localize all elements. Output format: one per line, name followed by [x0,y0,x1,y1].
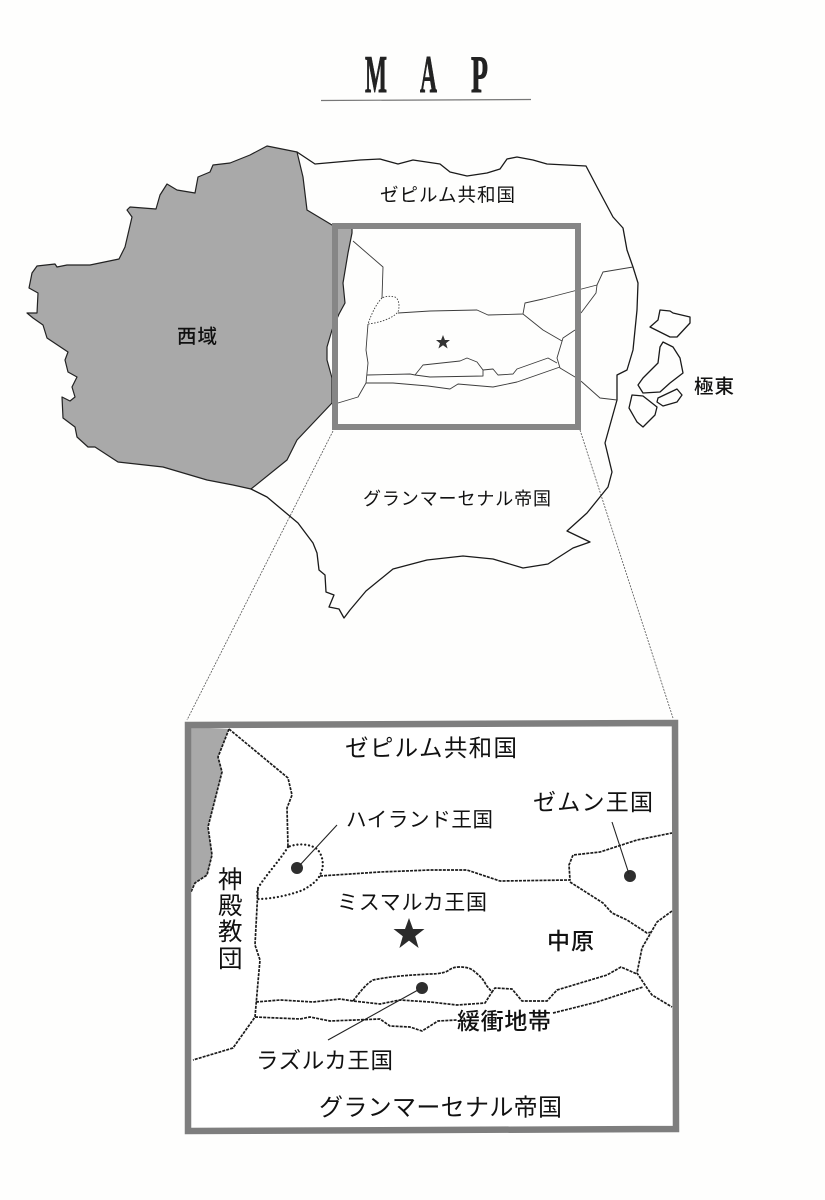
overview map [27,146,734,618]
label: Shrine Order (vertical): 教 [218,918,242,946]
label: Buffer Zone: 緩衝地帯 [457,1008,551,1034]
title underline [321,100,531,101]
label: Chugen: 中原 [547,928,594,954]
label: Zepilum Republic: ゼピルム共和国 [380,184,515,206]
label: Grammar Senal Empire: グランマーセナル帝国 [319,1094,562,1122]
shaded west strip [190,727,229,892]
islands: far east [629,310,690,427]
inset frame [188,723,676,1131]
title: MAP: A [420,46,437,104]
dotted zoom guide lines [187,430,673,720]
inset map [188,723,676,1131]
dashed borders [191,729,672,1060]
label: Shrine Order (vertical): 殿 [218,892,242,920]
title: MAP: M [365,46,387,104]
marker: Lazuluka Kingdom [328,982,428,1040]
label: Mismaruka Kingdom: ミスマルカ王国 [337,892,487,914]
label: Highland Kingdom: ハイランド王国 [346,808,493,832]
label: Far East: 極東 [694,376,734,398]
label: West: 西域 [177,326,217,348]
star: Mismaruka capital [394,918,424,948]
label: Grammar Senal Empire: グランマーセナル帝国 [363,489,551,509]
region: west (shaded) [27,146,352,489]
title: MAP: P [471,46,488,104]
north and east coastline [251,152,638,618]
marker: Zemun Kingdom [612,822,636,882]
inset background [188,723,676,1131]
label: Shrine Order (vertical): 団 [218,946,242,972]
dotted border: Highland Kingdom [257,844,323,899]
internal borders [338,241,633,403]
overview highlight frame [335,226,578,427]
label: Zepilum Republic: ゼピルム共和国 [345,735,517,761]
label: Shrine Order (vertical): 神 [218,866,242,894]
label: Lazuluka Kingdom: ラズルカ王国 [256,1048,393,1074]
star: capital marker [436,335,450,348]
marker: Highland Kingdom [291,825,337,874]
title: MAP [365,46,488,104]
label: Zemun Kingdom: ゼムン王国 [533,789,653,815]
